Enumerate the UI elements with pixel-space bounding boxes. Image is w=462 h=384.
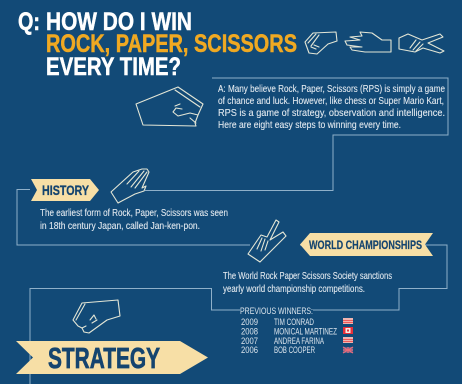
banner: history: HISTORY [42, 182, 89, 198]
intro text: Here are eight easy steps to winning every time. [218, 120, 401, 131]
title: ROCK, PAPER, SCISSORS [46, 30, 297, 58]
world championships text [223, 271, 392, 295]
icon: scissors hand [248, 220, 286, 262]
previous winners list: 2007 [241, 336, 258, 347]
icon: USA flag [343, 318, 353, 324]
history text: The earliest form of Rock, Paper, Scissors was seen [40, 208, 228, 219]
history text [40, 208, 228, 232]
world championships text: The World Rock Paper Scissors Society sanctions [223, 271, 392, 282]
previous winners list: 2006 [241, 345, 258, 356]
icon: USA flag [343, 337, 353, 343]
history text: in 18th century Japan, called Jan-ken-pon. [40, 221, 200, 232]
previous winners list: 2009 [241, 317, 258, 328]
banner: world championships [300, 233, 433, 256]
previous winners list: BOB COOPER [274, 345, 315, 356]
title: HOW DO I WIN [46, 8, 192, 36]
previous winners list [240, 306, 337, 356]
world championships text: yearly world championship competitions. [223, 284, 365, 295]
icon: small rock hand [305, 32, 337, 54]
icon: UK flag [343, 347, 353, 353]
title: Q: [18, 8, 40, 36]
icon: small paper hand [345, 32, 391, 52]
icon: strategy rock hand [73, 300, 120, 333]
title [18, 8, 297, 81]
previous winners list: PREVIOUS WINNERS: [240, 306, 313, 317]
intro text: RPS is a game of strategy, observation and intelligence. [218, 108, 445, 119]
previous winners list: 2008 [241, 326, 258, 338]
previous winners list: TIM CONRAD [274, 317, 314, 328]
icon: Canada flag [343, 327, 353, 334]
icon: large rock hand [136, 87, 203, 126]
banner: history [31, 179, 99, 201]
title: EVERY TIME? [46, 53, 181, 81]
banner: world championships: WORLD CHAMPIONSHIPS [309, 238, 422, 252]
previous winners list: ANDREA FARINA [274, 336, 324, 347]
icon: open hand [111, 169, 149, 203]
intro text [218, 84, 445, 131]
icon: small scissors hand [399, 34, 444, 53]
previous winners list: MONICAL MARTINEZ [274, 326, 337, 338]
banner: strategy: STRATEGY [48, 343, 160, 375]
